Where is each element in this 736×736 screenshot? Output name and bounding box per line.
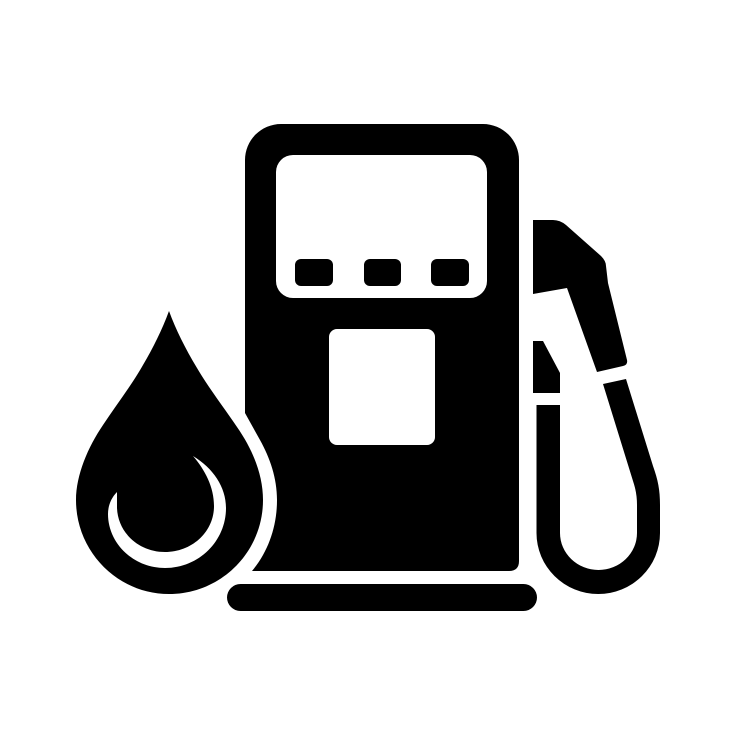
fuel hose <box>536 379 660 594</box>
lower panel <box>329 329 435 445</box>
drop highlight <box>108 456 226 568</box>
icon: pump body <box>245 124 519 571</box>
display buttons <box>295 259 469 286</box>
nozzle trigger <box>533 341 560 393</box>
icon: fuel nozzle <box>533 220 660 594</box>
icon: oil drop <box>76 311 263 594</box>
screen <box>276 155 487 298</box>
icon: pump base <box>227 584 537 611</box>
